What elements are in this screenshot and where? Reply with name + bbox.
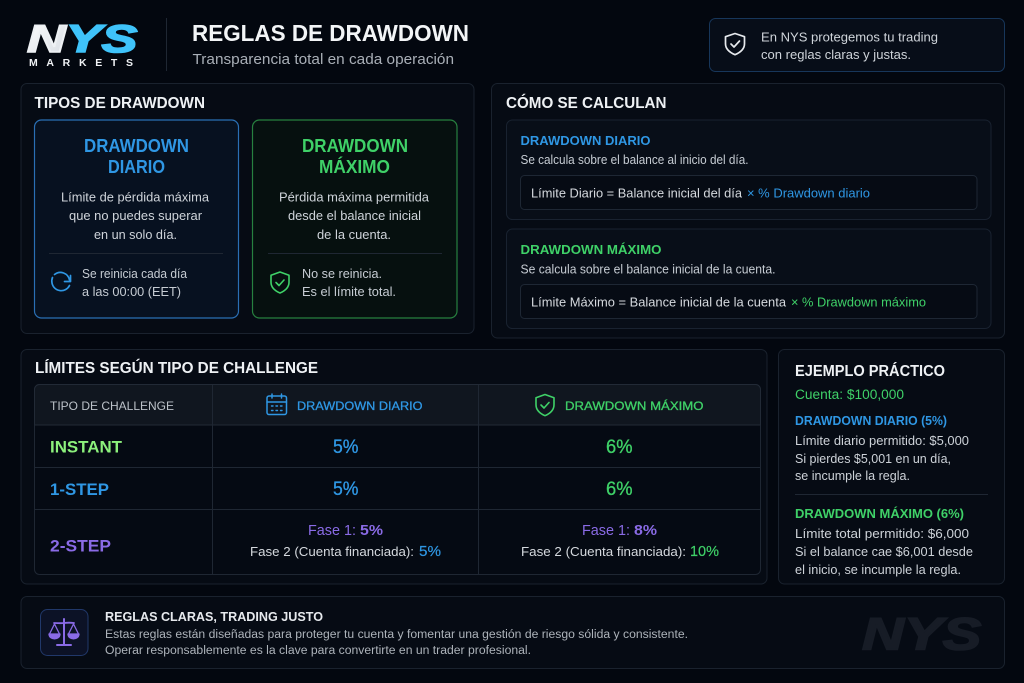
logo: NYS Markets: N — [27, 16, 67, 60]
logo: NYS Markets: YS — [66, 16, 137, 60]
card: drawdown diario: Se reinicia cada día — [82, 267, 187, 281]
row: instant: 6% — [606, 437, 633, 458]
card: drawdown diario: que no puedes superar — [69, 208, 203, 223]
icon: scales — [40, 610, 88, 656]
formula: limite maximo: × % Drawdown máximo — [791, 294, 926, 310]
row: 2-step: 2-STEP — [50, 536, 111, 556]
example: drawdown diario: Si pierdes $5,001 en un día, — [795, 451, 951, 466]
watermark: NYS: NYS — [862, 610, 982, 660]
card: drawdown maximo: de la cuenta. — [317, 227, 391, 242]
card: drawdown maximo: DRAWDOWN — [302, 135, 408, 156]
table header: DRAWDOWN MÁXIMO — [565, 398, 704, 413]
row: 2-step — [50, 523, 719, 560]
panel: ejemplo practico — [778, 350, 1004, 584]
example: drawdown maximo — [795, 506, 973, 577]
formula: limite diario: × % Drawdown diario — [747, 186, 870, 200]
icon: calendar — [267, 394, 286, 414]
example: drawdown diario: Límite diario permitido: $5,000 — [795, 433, 969, 448]
card: drawdown maximo — [252, 120, 457, 318]
card: drawdown maximo: Es el límite total. — [302, 285, 396, 299]
card: drawdown maximo: desde el balance inicial — [288, 208, 421, 223]
panel: como se calculan — [492, 84, 1004, 338]
row: 2-step: Fase 1: — [582, 523, 630, 539]
card: drawdown maximo: Pérdida máxima permitida — [279, 190, 430, 204]
row: instant: INSTANT — [50, 438, 123, 456]
row: instant: 5% — [333, 437, 359, 458]
formula: limite maximo — [520, 284, 977, 318]
icon: green shield — [271, 272, 289, 293]
formula: limite diario: Límite Diario = Balance inicial del día — [531, 186, 743, 200]
block: calculo maximo — [506, 229, 991, 328]
icon: shield — [536, 394, 554, 416]
table header: TIPO DE CHALLENGE — [50, 399, 174, 413]
subtitle: Transparencia total en cada operación — [192, 52, 454, 68]
logo: NYS Markets — [27, 16, 137, 69]
card: drawdown diario: en un solo día. — [94, 227, 177, 242]
card: drawdown diario — [34, 120, 238, 318]
table: limits — [34, 384, 761, 574]
card: drawdown diario: DIARIO — [108, 156, 165, 177]
example: drawdown maximo: el inicio, se incumple la regla. — [795, 562, 961, 577]
footer title: REGLAS CLARAS, TRADING JUSTO — [105, 610, 323, 624]
panel: footer — [21, 596, 1004, 668]
table header: DRAWDOWN DIARIO — [297, 399, 422, 413]
row: 1-step: 5% — [333, 479, 359, 500]
example: drawdown diario: se incumple la regla. — [795, 468, 910, 483]
example: drawdown diario: DRAWDOWN DIARIO (5%) — [795, 413, 947, 428]
heading: limites: LÍMITES SEGÚN TIPO DE CHALLENGE — [35, 358, 318, 377]
heading: ejemplo practico: EJEMPLO PRÁCTICO — [795, 361, 945, 380]
account value: Cuenta: $100,000 — [795, 387, 904, 402]
block: calculo diario — [506, 120, 991, 220]
logo: NYS Markets: MARKETS — [29, 57, 133, 69]
table header — [50, 394, 704, 416]
footer text — [105, 629, 688, 657]
card: drawdown diario: Límite de pérdida máxima — [61, 190, 210, 204]
example: drawdown diario — [795, 413, 969, 483]
row: instant — [50, 437, 633, 458]
row: 2-step: 10% — [690, 544, 719, 560]
block: calculo diario: Se calcula sobre el balance al inicio del día. — [520, 153, 748, 167]
panel: tipos de drawdown — [21, 84, 474, 334]
block: calculo maximo: Se calcula sobre el balance inicial de la cuenta. — [520, 262, 776, 276]
row: 1-step: 1-STEP — [50, 480, 109, 499]
callout: protection message — [710, 18, 1004, 72]
row: 2-step: 8% — [634, 523, 657, 539]
formula: limite diario — [520, 176, 977, 210]
card: drawdown maximo: MÁXIMO — [319, 156, 390, 177]
example: drawdown maximo: DRAWDOWN MÁXIMO (6%) — [795, 506, 964, 521]
row: 2-step: Fase 2 (Cuenta financiada): — [521, 544, 686, 559]
row: 2-step: 5% — [360, 523, 383, 539]
example: drawdown maximo: Límite total permitido: $6,000 — [795, 526, 969, 541]
heading: tipos de drawdown: TIPOS DE DRAWDOWN — [34, 95, 205, 112]
icon: shield check — [726, 34, 744, 55]
row: 1-step: 6% — [606, 479, 633, 500]
title: REGLAS DE DRAWDOWN — [192, 20, 469, 46]
footer text: Operar responsablemente es la clave para convertirte en un trader profesional. — [105, 645, 531, 657]
icon: refresh — [52, 272, 70, 291]
row: 2-step: Fase 1: — [308, 523, 356, 539]
card: drawdown diario: a las 00:00 (EET) — [82, 285, 181, 299]
block: calculo maximo: DRAWDOWN MÁXIMO — [520, 242, 662, 257]
formula: limite maximo: Límite Máximo = Balance inicial de la cuenta — [531, 294, 787, 310]
footer text: Estas reglas están diseñadas para proteger tu cuenta y fomentar una gestión de riesgo sólida y consistente. — [105, 629, 688, 641]
block: calculo diario: DRAWDOWN DIARIO — [520, 133, 650, 148]
example: drawdown maximo: Si el balance cae $6,001 desde — [795, 544, 973, 559]
row: 2-step: Fase 2 (Cuenta financiada): — [250, 544, 414, 559]
row: 2-step: 5% — [419, 544, 441, 560]
card: drawdown maximo: No se reinicia. — [302, 267, 382, 281]
card: drawdown diario: DRAWDOWN — [84, 135, 189, 156]
heading: como se calculan: CÓMO SE CALCULAN — [506, 93, 666, 112]
callout: protection message: En NYS protegemos tu trading — [761, 30, 938, 44]
panel: limites segun tipo de challenge — [21, 350, 767, 584]
callout: protection message: con reglas claras y justas. — [761, 47, 911, 62]
row: 1-step — [50, 479, 633, 500]
